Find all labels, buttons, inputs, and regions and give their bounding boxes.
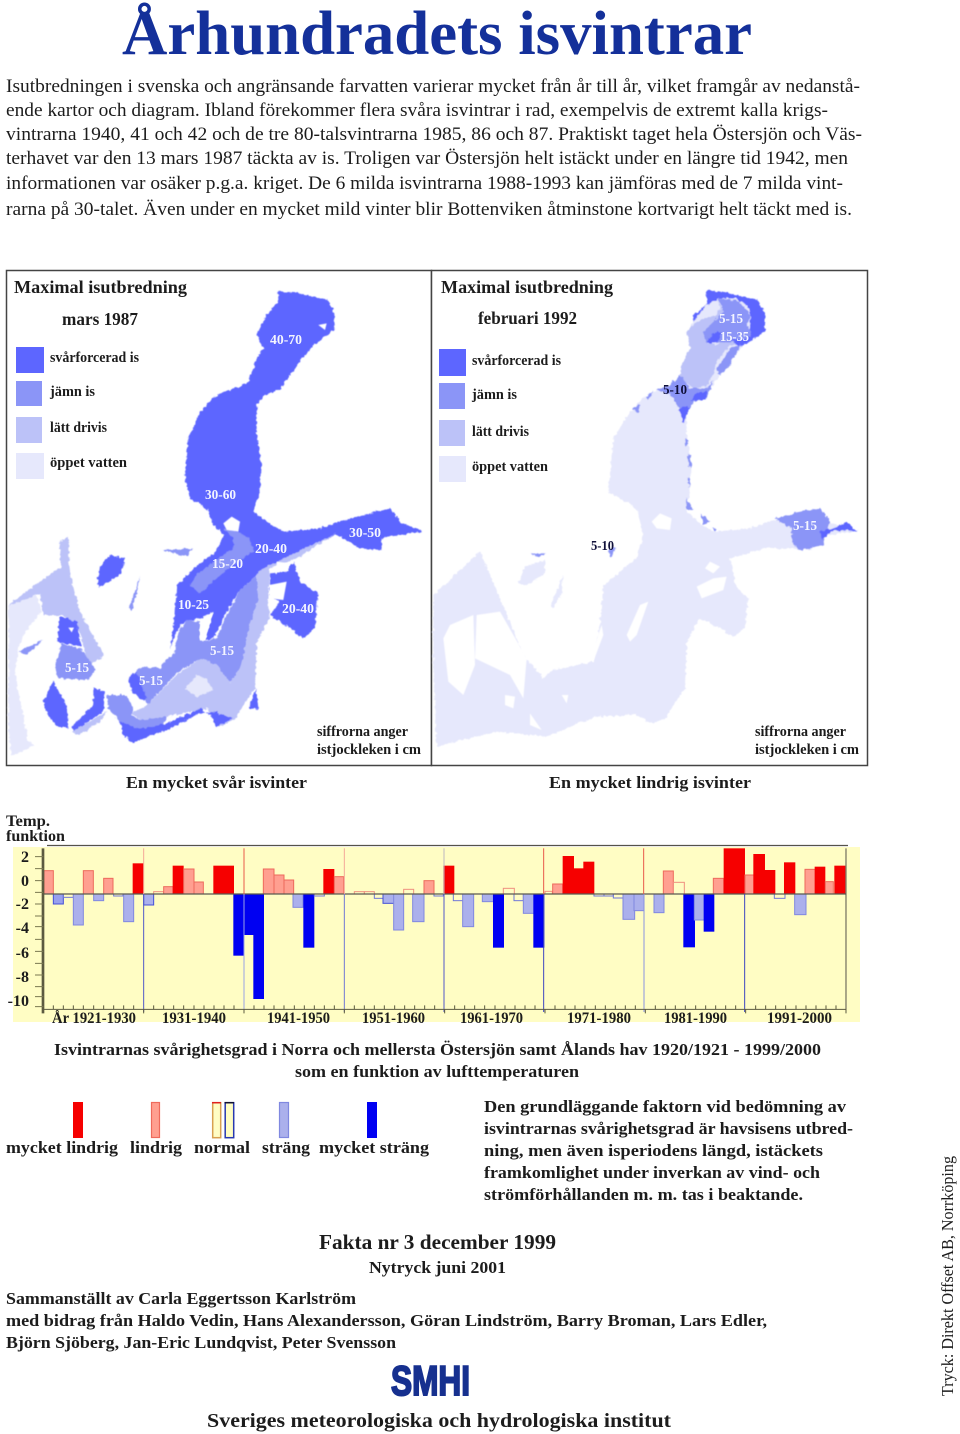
chart caption: Isvintrarnas svårighetsgrad i Norra och mellersta Östersjön samt Ålands hav 1920/1921 - 1999/2000 — [54, 1040, 821, 1059]
intro text: ende kartor och diagram. Ibland förekommer flera svåra isvintrar i rad, exempelvis de extremt kalla krigs- — [6, 100, 828, 121]
axes and ticks — [35, 848, 846, 1013]
y-axis labels: -10 — [8, 993, 29, 1010]
y-axis labels: -2 — [16, 896, 29, 913]
note 1992 — [755, 724, 859, 758]
map captions: En mycket svår isvinter — [126, 773, 307, 792]
bars — [44, 848, 845, 999]
note 1987: siffrorna anger — [317, 724, 408, 740]
legend 1992 — [439, 277, 613, 482]
explanatory text: strömförhållanden m. m. tas i beaktande. — [484, 1185, 803, 1204]
intro text: Isutbredningen i svenska och angränsande farvatten varierar mycket från år till år, vilket framgår av nedanstå- — [6, 76, 860, 97]
note 1987: istjockleken i cm — [317, 742, 421, 758]
thickness labels 1987: 30-60 — [205, 488, 236, 503]
thickness labels 1987: 10-25 — [178, 598, 209, 613]
legend 1992: februari 1992 — [478, 308, 577, 328]
y-axis labels: -4 — [16, 920, 29, 937]
explanatory text: isvintrarnas svårighetsgrad är havsisens utbred- — [484, 1119, 853, 1138]
Swedish lakes — [518, 560, 563, 608]
legend 1987: svårforcerad is — [50, 350, 139, 366]
thickness labels 1987: 30-50 — [349, 526, 381, 541]
intro text: rarna på 30-talet. Även under en mycket mild vinter blir Bottenviken åtminstone kortvarigt helt täckt med is. — [6, 199, 852, 220]
x-axis labels: 1941-1950 — [267, 1010, 330, 1027]
map: ice extent 1992 — [433, 290, 857, 747]
thickness labels 1987: 5-15 — [139, 674, 163, 689]
institute name: Sveriges meteorologiska och hydrologiska institut — [207, 1410, 671, 1432]
x-axis labels: 1931-1940 — [162, 1010, 226, 1027]
legend 1992: öppet vatten — [472, 459, 549, 475]
explanatory text — [484, 1097, 853, 1204]
legend: severity classes — [6, 1102, 430, 1157]
x-axis labels: 1971-1980 — [567, 1010, 631, 1027]
legend 1987: öppet vatten — [50, 455, 128, 471]
x-axis labels: 1951-1960 — [362, 1010, 425, 1027]
credits: Björn Sjöberg, Jan-Eric Lundqvist, Peter Svensson — [6, 1333, 397, 1352]
x-axis labels: 1991-2000 — [767, 1010, 832, 1027]
legend 1992: lätt drivis — [472, 424, 529, 440]
thickness labels 1987: 5-15 — [65, 661, 89, 676]
island gaps 1992 — [443, 513, 727, 730]
y-axis labels: 2 — [21, 849, 29, 866]
explanatory text: ning, men även isperiodens längd, istäckets — [484, 1141, 823, 1160]
thickness labels 1987: 15-20 — [212, 557, 243, 572]
chart caption: som en funktion av lufttemperaturen — [295, 1062, 580, 1081]
fact sheet heading: Fakta nr 3 december 1999 — [319, 1230, 556, 1254]
y-axis labels: 0 — [21, 873, 29, 890]
thickness labels 1987 — [65, 333, 381, 689]
credits: med bidrag från Haldo Vedin, Hans Alexandersson, Göran Lindström, Barry Broman, Lars Edler, — [6, 1311, 767, 1330]
x-axis labels: År 1921-1930 — [52, 1009, 136, 1027]
swatch: normal — [212, 1103, 234, 1138]
fact sheet heading — [319, 1230, 556, 1277]
panel: map March 1987 — [6, 270, 432, 766]
swatch: mycket sträng — [367, 1102, 377, 1138]
intro text: informationen var osäker p.g.a. kriget. De 6 milda isvintrarna 1988-1993 kan jämföras med de 7 milda vint- — [6, 173, 843, 194]
note 1992: siffrorna anger — [755, 724, 846, 740]
intro text: vintrarna 1940, 41 och 42 och de tre 80-talsvintrarna 1985, 86 och 87. Praktiskt taget hela Östersjön och Väs- — [6, 124, 862, 145]
thickness labels 1992: 5-10 — [591, 539, 614, 554]
printer credit: Tryck: Direkt Offset AB, Norrköping — [938, 1156, 957, 1396]
legend 1987: jämn is — [49, 384, 95, 400]
y-axis title — [6, 813, 65, 845]
note 1992: istjockleken i cm — [755, 742, 859, 758]
legend 1992: jämn is — [471, 387, 517, 403]
thickness labels 1992: 5-15 — [719, 312, 743, 327]
legend 1987: lätt drivis — [50, 420, 107, 436]
panel: map February 1992 — [432, 270, 868, 766]
legend labels: lindrig — [130, 1138, 183, 1157]
y-axis labels — [8, 849, 29, 1010]
Åland and island gaps — [68, 323, 327, 640]
thickness labels 1992: 15-35 — [720, 330, 749, 345]
legend 1987: mars 1987 — [62, 309, 138, 329]
thickness labels 1992 — [591, 312, 817, 554]
legend 1992: svårforcerad is — [472, 353, 561, 369]
x-axis labels: 1981-1990 — [664, 1010, 727, 1027]
chart caption — [54, 1040, 821, 1081]
thickness labels 1987: 20-40 — [282, 602, 314, 617]
swatch: sträng — [280, 1102, 288, 1138]
note 1987 — [317, 724, 421, 758]
legend 1987 — [14, 277, 187, 479]
x-axis labels — [52, 1009, 832, 1027]
thickness labels 1987: 20-40 — [255, 542, 287, 557]
x-axis labels: 1961-1970 — [460, 1010, 523, 1027]
legend labels: mycket sträng — [319, 1138, 430, 1157]
legend labels: normal — [194, 1138, 250, 1157]
baseline and decade dividers — [43, 848, 846, 1012]
intro text: terhavet var den 13 mars 1987 täckta av is. Troligen var Östersjön helt istäckt under en längre tid 1942, men — [6, 148, 849, 169]
map captions: En mycket lindrig isvinter — [549, 773, 751, 792]
swatch: lindrig — [152, 1102, 160, 1138]
legend 1987: Maximal isutbredning — [14, 277, 187, 297]
swatch: mycket lindrig — [73, 1102, 83, 1138]
y-axis title: Temp. — [6, 813, 50, 830]
chart: temperature function per winter 1921-2000 — [8, 846, 860, 1027]
legend labels — [6, 1138, 430, 1157]
title: Århundradets isvintrar — [122, 0, 752, 68]
map: ice extent 1987 — [8, 292, 422, 757]
explanatory text: framkomlighet under inverkan av vind- och — [484, 1163, 821, 1182]
thickness labels 1987: 5-15 — [210, 644, 234, 659]
legend 1992: Maximal isutbredning — [441, 277, 613, 297]
y-axis labels: -6 — [16, 945, 29, 962]
SMHI logo: SMHI — [391, 1357, 470, 1404]
legend labels: mycket lindrig — [6, 1138, 119, 1157]
y-axis title: funktion — [6, 828, 65, 845]
thickness labels 1992: 5-10 — [663, 383, 687, 398]
thickness labels 1987: 40-70 — [270, 333, 302, 348]
credits — [6, 1289, 767, 1352]
fact sheet heading: Nytryck juni 2001 — [369, 1258, 506, 1277]
y-axis labels: -8 — [16, 969, 29, 986]
intro text — [6, 76, 862, 220]
thickness labels 1992: 5-15 — [793, 519, 817, 534]
map captions — [126, 773, 751, 792]
explanatory text: Den grundläggande faktorn vid bedömning av — [484, 1097, 847, 1116]
legend labels: sträng — [262, 1138, 311, 1157]
credits: Sammanställt av Carla Eggertsson Karlström — [6, 1289, 356, 1308]
